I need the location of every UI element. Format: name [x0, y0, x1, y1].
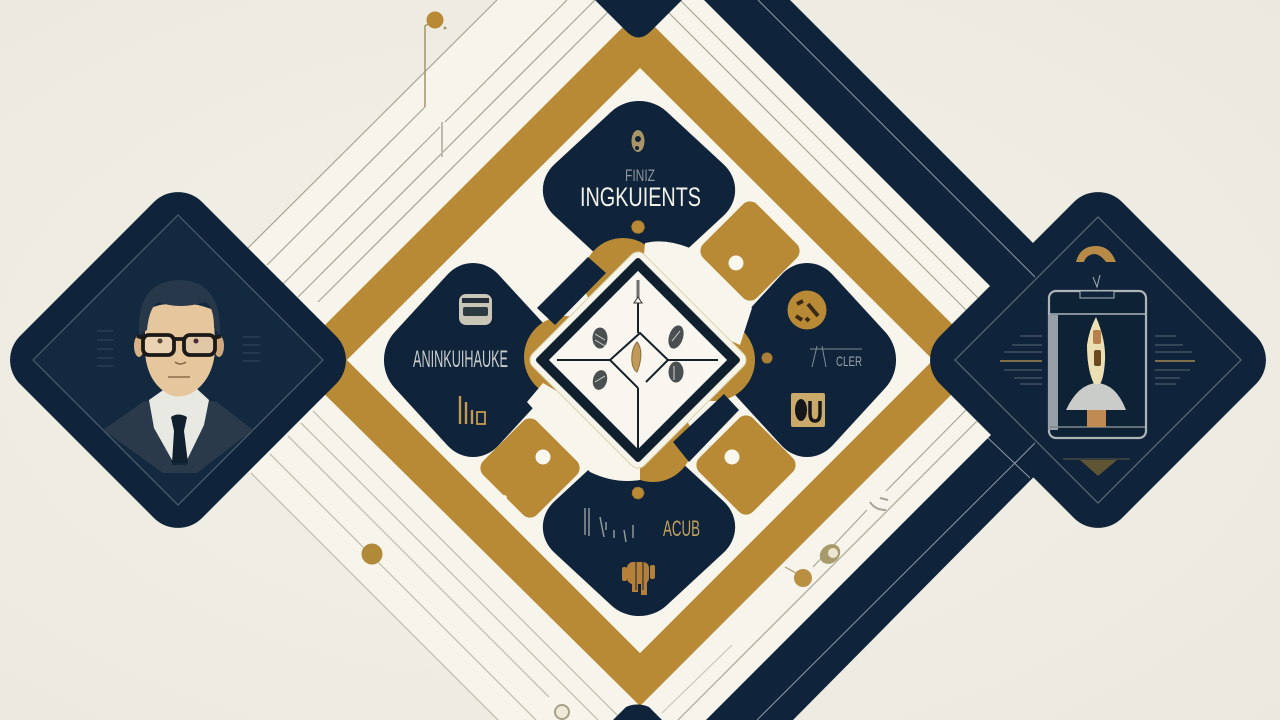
jacket — [103, 398, 253, 473]
icon: left badge — [459, 294, 492, 325]
person illustration — [103, 280, 253, 473]
icon: gold arch — [1076, 246, 1116, 262]
icon: left bars — [460, 396, 485, 424]
icon: jar — [1048, 291, 1146, 438]
eyes — [158, 338, 162, 344]
bottom navy diamond tab — [613, 704, 662, 720]
light outer diamond field — [137, 0, 1065, 720]
gold tile bottom right — [692, 411, 800, 519]
panel: bottom card — [527, 423, 751, 631]
accent dot lower right — [794, 569, 812, 587]
decorative thin lines lower left — [251, 411, 622, 720]
band crossing lines — [988, 259, 1035, 478]
panel: portrait card — [10, 192, 346, 528]
inner outline — [33, 215, 323, 505]
icon: gold figure — [622, 562, 655, 595]
gold lobes behind center — [524, 238, 755, 482]
panel: product card — [916, 178, 1280, 542]
decorative thin lines upper right — [656, 0, 978, 310]
icon: compass needle — [634, 280, 642, 303]
faint hatch marks — [97, 331, 260, 366]
figure pod — [1087, 317, 1105, 384]
gold tile top right — [696, 197, 804, 305]
icon: small flower — [762, 352, 772, 364]
glasses — [137, 335, 221, 355]
label bottom: ACUB — [663, 516, 700, 541]
icon: small v — [1093, 275, 1100, 287]
accent ring bottom — [555, 705, 569, 719]
gold diamond ring — [290, 11, 987, 706]
icon: tan badge — [791, 393, 825, 427]
decorative thin lines lower right — [662, 410, 977, 720]
accent dot top — [426, 12, 446, 30]
icon: four leaves — [591, 323, 686, 391]
small mark lower right — [870, 498, 888, 510]
accent dot lower left — [362, 544, 382, 564]
panel: left card — [369, 247, 577, 473]
navy outer frame bands — [704, 0, 1100, 720]
inner cream diamond — [347, 68, 933, 653]
label right — [810, 346, 862, 369]
heading small: FINIZ — [625, 166, 655, 185]
label right: CLER — [836, 353, 862, 369]
label left: ANINKUIHAUKE — [413, 346, 508, 373]
icon: round gold seal — [788, 290, 826, 330]
panel: top ingredients card — [527, 86, 751, 294]
label scribble — [585, 508, 633, 542]
accent ring lower right — [816, 540, 844, 568]
face — [145, 303, 215, 396]
shirt — [149, 388, 209, 460]
ears — [134, 336, 142, 357]
navy stripes behind center — [537, 257, 739, 462]
icon: bottom triangle — [1063, 459, 1130, 476]
heading main: INGKUIENTS — [580, 182, 701, 212]
icon: small gold flower — [632, 487, 644, 499]
central compass diamond — [526, 248, 750, 472]
cream channels — [527, 241, 752, 481]
icon: top flower — [632, 130, 644, 152]
hatch lines — [1000, 336, 1195, 384]
hair — [139, 280, 220, 335]
inner outline — [955, 217, 1241, 503]
compass lines — [557, 300, 718, 452]
gold tile bottom left — [476, 414, 584, 522]
top navy diamond tab — [595, 0, 682, 38]
figure stem — [1087, 410, 1106, 427]
tie — [171, 414, 188, 463]
icon: small gold flower — [632, 220, 644, 234]
icon: central feather — [632, 342, 641, 372]
decorative thin lines upper left — [248, 0, 620, 302]
figure dome — [1066, 383, 1126, 410]
panel: right card — [703, 247, 911, 473]
nose and mouth — [168, 362, 190, 377]
